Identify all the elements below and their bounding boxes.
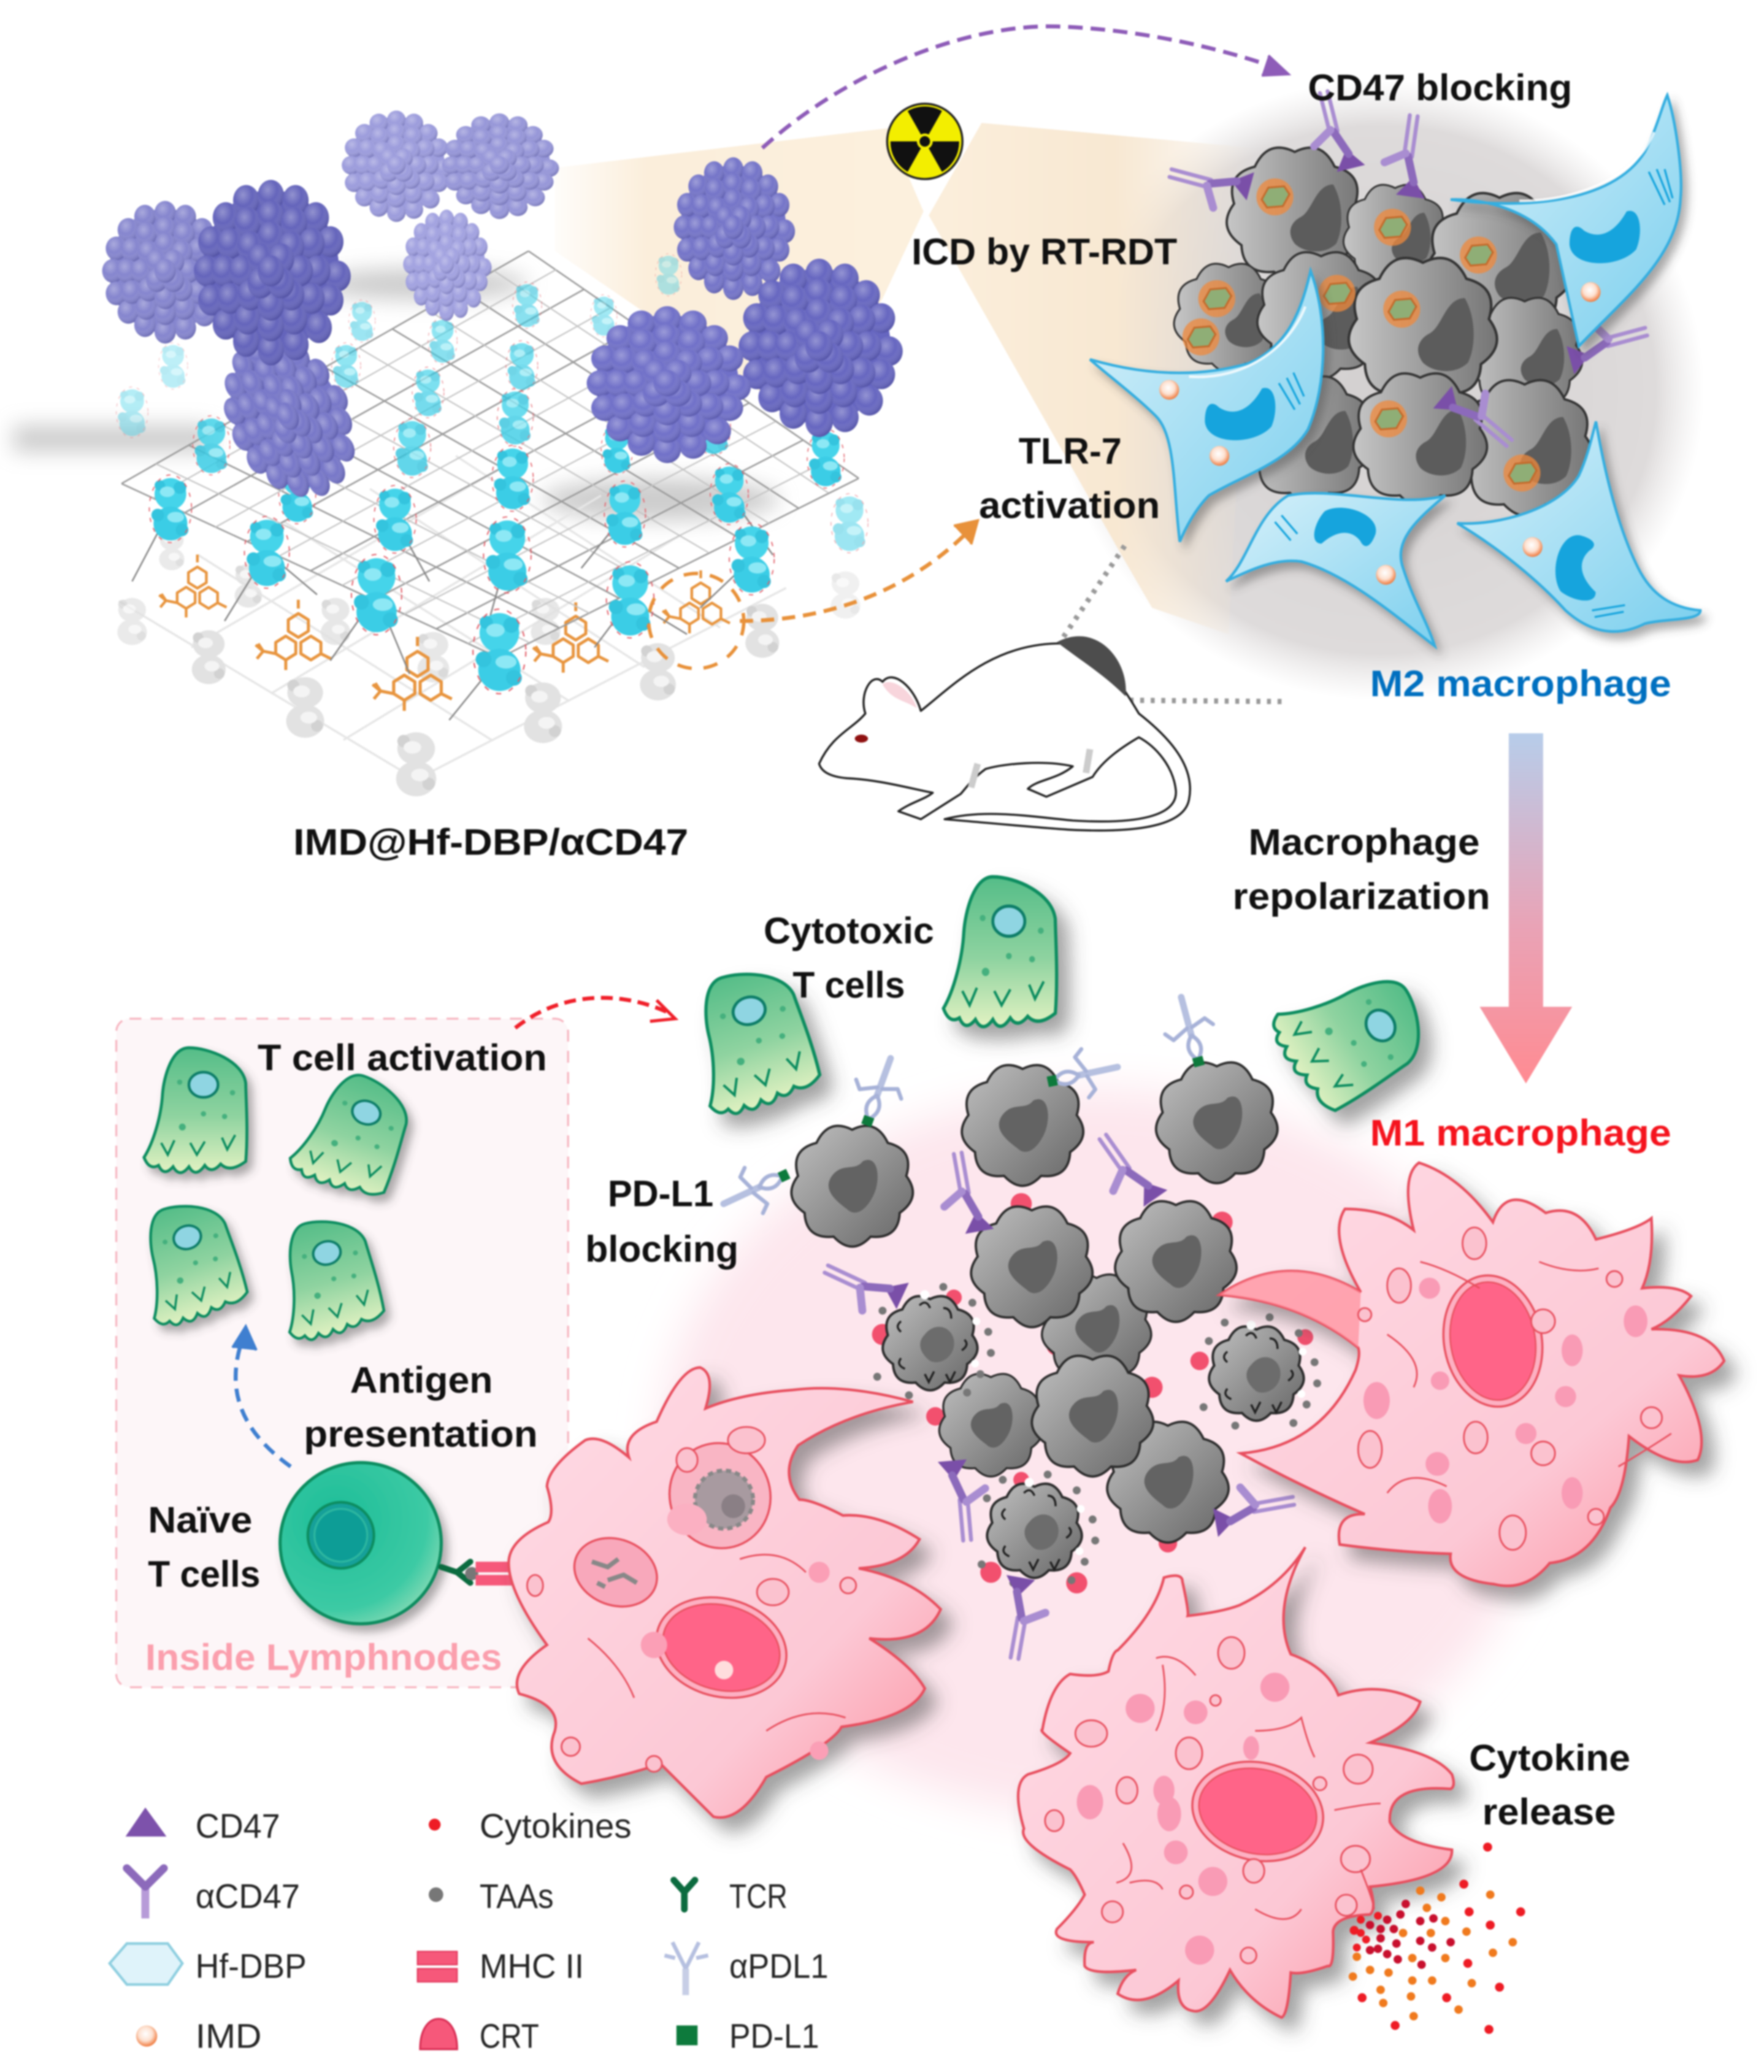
label: Cytotoxic T cells: T cells [792, 964, 905, 1005]
panel: M2 macrophage tumour microenvironment [1090, 86, 1700, 646]
CRT blobs on cells [872, 1193, 1313, 1594]
M2 macrophage 4 [1457, 421, 1700, 632]
M2 macrophage 2 [1090, 271, 1323, 542]
tumour cells with CD47 and CRT [791, 1062, 1278, 1543]
label: Antigen presentation: presentation [304, 1413, 538, 1455]
αCD47 antibodies [817, 1124, 1297, 1662]
label: Antigen presentation: Antigen [350, 1359, 493, 1400]
legend: CD47 [126, 1806, 280, 1845]
nucleus [645, 1583, 798, 1712]
label: Macrophage repolarization: Macrophage [1249, 821, 1479, 863]
MOF nanoplatform: IMD@Hf-DBP/αCD47 [13, 110, 903, 796]
blue dashed arrow [232, 1327, 291, 1467]
legend: αCD47 [127, 1868, 300, 1919]
panel: inside lymphnodes [117, 1019, 568, 1687]
legend: αPDL1 [664, 1942, 829, 1995]
legend: Cytokines: Cytokines [480, 1806, 632, 1845]
label: Naïve T cells: Naïve [148, 1499, 252, 1541]
antibody 2: αCD47 protein [342, 110, 559, 321]
heading: CD47 blocking: CD47 blocking [1308, 67, 1572, 109]
label: Naïve T cells: T cells [148, 1553, 260, 1595]
legend: TAAs [429, 1876, 554, 1915]
cytotoxic T cells [673, 877, 1441, 1122]
legend: Hf-DBP [110, 1944, 307, 1986]
organelles [527, 1427, 856, 1772]
arm highlight [1219, 1271, 1361, 1348]
shadow bands under antibodies [13, 268, 780, 521]
heading: TLR-7 activation: TLR-7 [1019, 430, 1122, 472]
label: Cytotoxic T cells: Cytotoxic [764, 910, 934, 951]
legend: TCR [674, 1876, 788, 1915]
αCD47 antibodies on cells [1165, 86, 1652, 460]
legend: Hf-DBP: Hf-DBP [196, 1947, 307, 1986]
dashed box [117, 1019, 568, 1687]
radiation symbol [887, 104, 962, 179]
label: M2 macrophage: M2 macrophage [1370, 662, 1671, 704]
DBP linker molecules [159, 554, 730, 711]
MHC II receptor [475, 1562, 515, 1586]
dashed circle around DBP [649, 574, 744, 669]
legend: PD-L1 [677, 2017, 819, 2055]
naive T cell [280, 1463, 441, 1624]
cyan Hf nodes [117, 254, 868, 694]
legend: CRT [420, 2017, 539, 2055]
label: Inside Lymphnodes: Inside Lymphnodes [145, 1636, 502, 1678]
legend: IMD [136, 2017, 261, 2055]
label: IMD@Hf-DBP/αCD47: IMD@Hf-DBP/αCD47 [293, 821, 688, 863]
orange dashed arrow to TLR-7 [740, 521, 978, 621]
legend: αCD47: αCD47 [196, 1876, 300, 1915]
legend [110, 1806, 829, 2055]
upper lattice grid [121, 251, 859, 720]
red dashed arrow to cytotoxic T cells [515, 998, 675, 1028]
dotted lines from mouse tumour [1064, 545, 1288, 702]
organelles [1045, 1637, 1381, 1965]
legend: PD-L1: PD-L1 [729, 2017, 819, 2055]
dying tumour cells releasing TAAs [873, 1283, 1321, 1587]
M1 macrophage: right [1219, 1163, 1724, 1586]
organelles [1358, 1227, 1671, 1550]
legend: αPDL1: αPDL1 [729, 1947, 829, 1986]
engulfed dying cell [655, 1429, 785, 1562]
grey tumour tissue circle [1057, 79, 1705, 700]
M1 macrophage: left, presenting antigen [508, 1367, 941, 1817]
purple dashed arrow [762, 26, 1288, 148]
label: Cytokine release: Cytokine [1469, 1736, 1630, 1778]
nucleus [1433, 1267, 1552, 1414]
tumour cells [1174, 148, 1593, 515]
legend: TCR: TCR [729, 1876, 788, 1915]
radiation beam [555, 123, 1255, 634]
label: Macrophage repolarization: repolarization [1233, 875, 1490, 917]
heading: ICD by RT-RDT: ICD by RT-RDT [911, 231, 1177, 272]
legend: MHC II [418, 1947, 584, 1986]
Hf-DBP uptake hexagons [1183, 178, 1541, 491]
heading: TLR-7 activation: activation [979, 484, 1160, 526]
antibody 1: αCD47 protein [102, 180, 381, 520]
αPDL1 antibodies [713, 991, 1222, 1227]
legend: MHC II: MHC II [480, 1947, 584, 1986]
legend: TAAs: TAAs [480, 1876, 554, 1915]
label: Cytokine release: release [1482, 1791, 1616, 1833]
repolarization gradient arrow [1479, 734, 1572, 1083]
M2 macrophage 3 [1226, 493, 1445, 646]
antibody 3: αCD47 protein [586, 157, 903, 463]
legend: IMD: IMD [196, 2017, 261, 2055]
label: PD-L1 blocking: PD-L1 [608, 1173, 713, 1214]
legend: CRT: CRT [480, 2017, 539, 2055]
engulfed fragment [565, 1527, 667, 1617]
TCR and antigen [441, 1562, 478, 1583]
label: M1 macrophage: M1 macrophage [1370, 1112, 1671, 1154]
pink tumour halo [661, 1090, 1546, 1817]
label: T cell activation: T cell activation [258, 1037, 547, 1078]
lower lattice layer [119, 456, 786, 780]
tumour cell cluster under attack [713, 991, 1321, 1662]
legend: CD47: CD47 [196, 1806, 280, 1845]
cytokine release dots [1349, 1843, 1525, 2034]
M1 macrophage: bottom, cytokine releasing [1018, 1547, 1454, 2017]
mouse illustration [819, 636, 1190, 831]
label: PD-L1 blocking: blocking [585, 1228, 738, 1270]
activated T cells [123, 1048, 417, 1346]
M2 macrophage 1 [1451, 95, 1681, 346]
grey lower nodes [117, 530, 861, 796]
nucleus [1183, 1750, 1333, 1873]
